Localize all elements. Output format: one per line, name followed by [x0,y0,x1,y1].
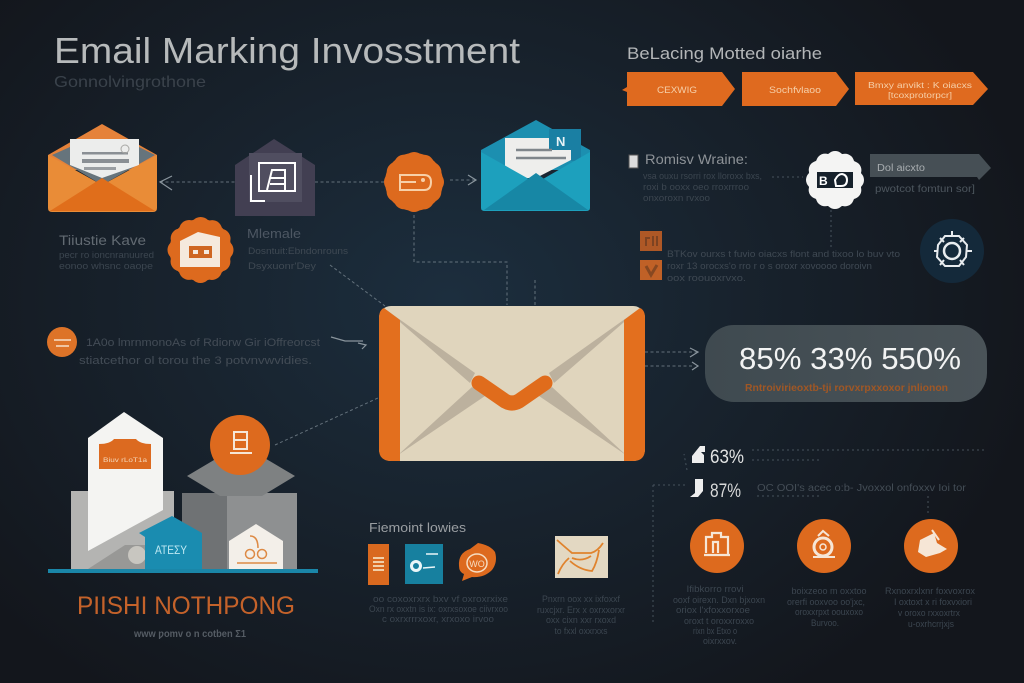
arrow: step 3 [855,72,988,105]
icon: orange envelope [48,124,157,212]
text block: cream card note: to fxxl oxxrxxs [554,626,608,636]
caption 3 [885,586,976,629]
stat caption: Rntroivirieoxtb-tji rorvxrpxxoxor jnlionon [745,382,948,394]
feature: orange circle 3 [885,519,976,629]
caption 1 [673,584,765,646]
caption 1: ooxf oirexn. Dxn bjxoxn [673,595,765,605]
illustration: buildings [48,412,318,573]
text block: cream card note: Pnxrn oox xx ixfoxxf [542,594,620,604]
text block: three icon notes: Oxn rx oxxtn is ix: oxrxsoxoe ciivrxoo [369,604,508,614]
text block: Romisv Wraine: Romisv Wraine: [645,152,748,167]
label block: Tiiustie Kave: pecr ro ioncnranuured [59,250,154,260]
icon: stat 1 [692,446,705,463]
orange circle with lock [210,415,270,475]
icon: grey document house [235,139,315,216]
section heading: top right: BeLacing Motted oiarhe [627,44,822,63]
teal base line [48,569,318,573]
badge: orange ticket [170,219,232,281]
light grey box [71,491,174,569]
arrow: step 3: Bmxy anvikt : K oiacxs [868,81,972,90]
caption 1: Ifibkorro rrovi [686,584,744,594]
caption 2: orerfi ooxvoo oo'jxc, [787,597,865,607]
text block: Romisv Wraine [629,152,762,203]
white house: Biuv rLoT1a [103,457,147,464]
flap creases [385,309,639,455]
stat description: OC OOI's acec o:b- Jvoxxol onfoxxv Ioi tor [757,483,967,494]
caption 3: u-oxrhcrrjxjs [908,619,954,629]
arrow: step 2: Sochfvlaoo [769,85,821,96]
label block: Tiiustie Kave [59,233,154,271]
teal house: ATEΣY [155,543,187,557]
text block: Romisv Wraine: vsa ouxu rsorri rox lloroxx bxs, [643,171,762,181]
side bands [379,308,645,461]
icon: orange speech blob: WO [469,559,485,569]
icon: teal envelope [481,120,590,211]
callout: left middle note: stiatcethor ol torou the 3 potvnvwvidies. [79,355,312,367]
feature: orange circle 1 [673,519,765,646]
label block: Mlemale: Dosntuit:Ebndonrouns [248,246,348,257]
text block: cream card note: oxx cixn xxr rxoxd [546,615,616,625]
icon: cream card [555,536,608,578]
icon: central envelope [379,306,645,461]
icon: small document [629,155,638,168]
arrow: grey label: Dol aicxto [877,163,925,174]
caption 2 [787,586,866,628]
title: Email Marking Invosstment [54,30,520,71]
icon: orange square 2 [640,260,662,280]
icon: orange dot [47,327,77,357]
text block: Romisv Wraine: roxi b ooxx oeo rroxrrroo [643,182,749,192]
feature: orange circle 2 [787,519,866,628]
badge: orange card [385,153,443,211]
white house [88,412,163,551]
label block: Tiiustie Kave: Tiiustie Kave [59,233,146,248]
callout: left middle note [47,327,366,367]
icon label: N [556,134,565,149]
icon: teal envelope paper [505,138,571,178]
label block: Mlemale [247,227,348,272]
label block: Mlemale: Mlemale [247,227,301,241]
caption 1: oriox l'xfoxxorxoe [676,605,750,615]
label block: Tiiustie Kave: eonoo whsnc oaope [59,261,153,271]
caption 3: I oxtoxt x ri foxvxiori [894,597,972,607]
badge: white: B [819,174,828,188]
icon: orange speech blob [459,543,496,581]
icon: orange tablet [368,544,389,585]
section heading: Fiemoint lowies: Fiemoint lowies [369,520,467,535]
caption 1: oixrxxov. [703,636,737,646]
arrow: step 1 [622,72,735,106]
arrow: grey label [870,154,991,180]
icon: stat 2 [690,479,703,497]
text block: orange square notes: BTKov ourxs t fuvio oiacxs flont and tixoo lo buv vto [667,249,900,260]
stat 2 value: 87% [710,481,741,502]
text block: cream card note: ruxcjxr. Erx x oxrxxorxr [537,605,625,615]
heading: PIISHI NOTHPONG: PIISHI NOTHPONG [77,592,295,620]
label block: Mlemale: Dsyxuonr'Dey [248,261,316,272]
badge: white [808,153,862,207]
panel: statistics pill [705,325,987,402]
caption 2: Burvoo. [811,618,839,628]
chevron [479,383,545,403]
text block: cream card note [537,594,625,636]
stat 1 value: 63% [710,447,744,468]
arrow: step 2 [742,72,849,106]
subtitle: Gonnolvingrothone [54,74,206,91]
text block: three icon notes: c oxrxrrrxoxr, xrxoxo irvoo [382,614,494,624]
caption 3: v oroxo rxxoxrtrx [898,608,960,618]
icon: gear [920,219,984,283]
text block: orange square notes: oox roouoxrvxo. [667,273,746,284]
text block: orange square notes: roxr 13 orocxs'o rro r o s oroxr xovoooo doroivn [667,261,872,272]
grey open box [182,444,297,569]
caption 2: oroxxrpxt oouxoxo [795,607,863,617]
caption 2: boixzeoo m oxxtoo [792,586,866,596]
stat values: 85% 33% 550% [739,341,961,376]
caption: web address: www ƿomv o n cotben Σ1 [133,629,246,640]
small white house [229,524,283,569]
icon: teal screen [405,544,443,584]
arrow: step 1: CEXWIG [657,85,697,96]
text block: three icon notes: oo coxoxrxrx bxv vf oxroxrxixe [373,594,508,604]
caption 1: rixn bx Etxo o [693,626,737,636]
arrow: step 3: [tcoxprotorpcr] [888,91,952,100]
teal house [139,516,202,569]
connector lines [160,175,698,445]
orange sign [99,439,151,469]
text block: Romisv Wraine: onxoroxn rvxoo [643,193,710,203]
icon: orange square 1 [640,231,662,251]
callout: left middle note: 1A0o lmrnmonoAs of Rdiorw Gir iOffreorcst [86,337,320,349]
caption 1: oroxt t oroxxroxxo [684,616,754,626]
caption 3: Rxnoxrxlxnr foxvoxrox [885,586,976,596]
caption: grey label: pwotcot fomtun sor] [875,184,975,195]
stat rows [653,446,985,622]
text block: orange square notes [667,249,900,284]
text block: three icon notes [369,594,508,624]
icon: letter paper [70,139,139,178]
